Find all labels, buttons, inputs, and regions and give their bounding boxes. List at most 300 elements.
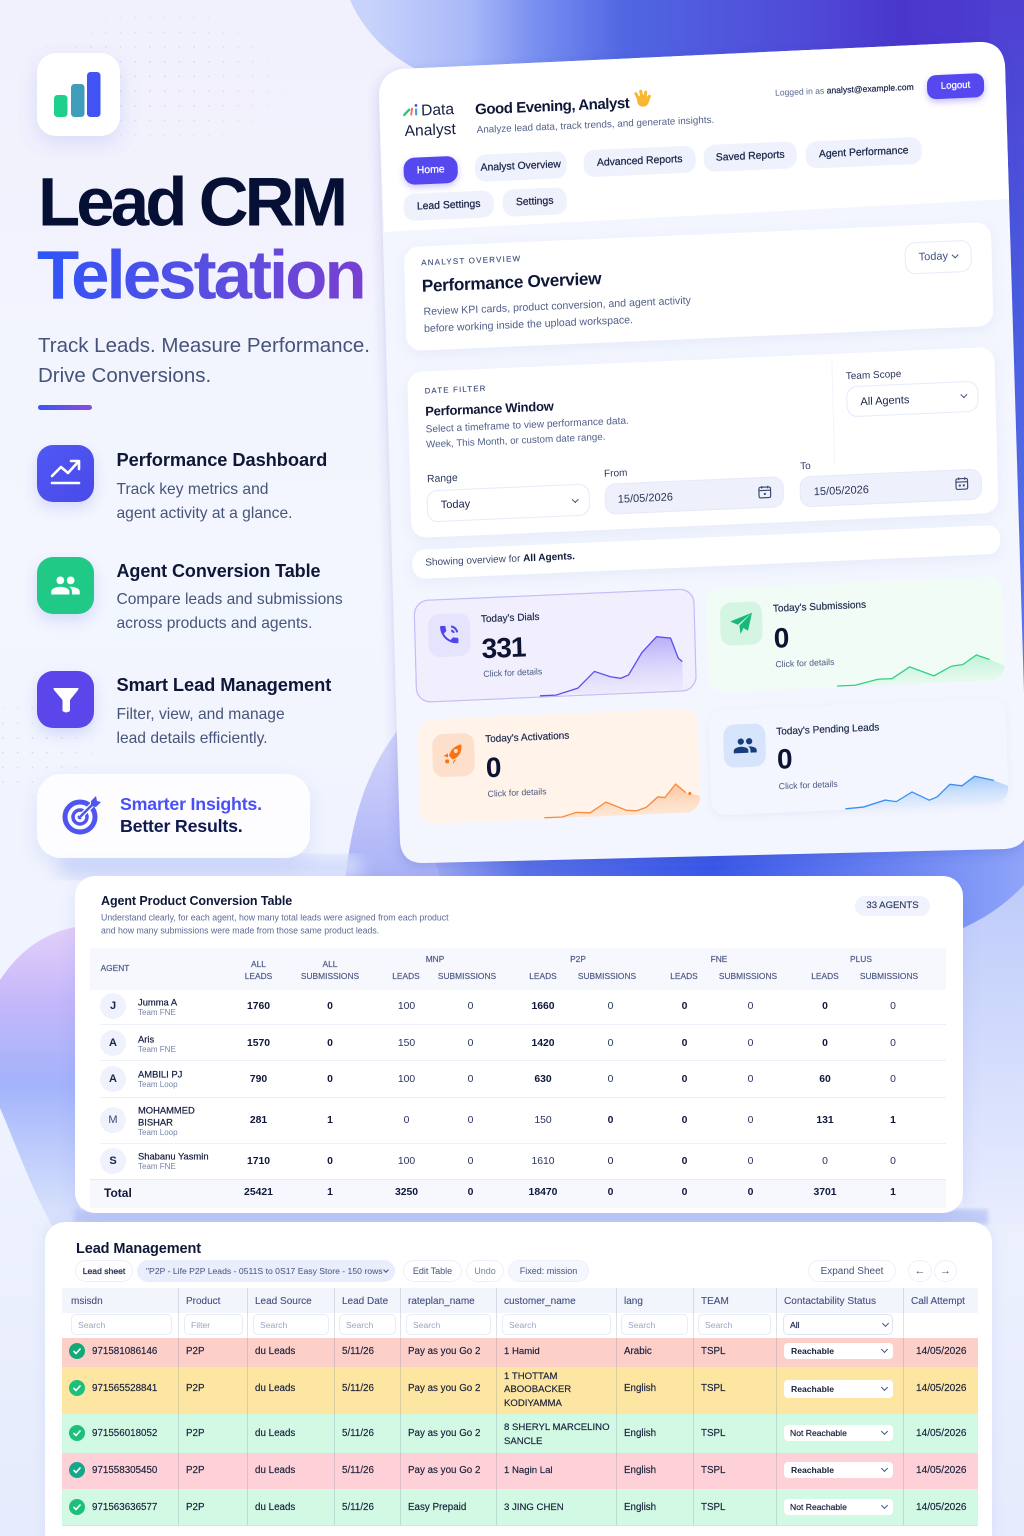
icon: rocket xyxy=(432,733,475,777)
lead row 4: du Leads xyxy=(255,1465,295,1476)
row: total: Total xyxy=(104,1186,132,1200)
row: Aris xyxy=(100,1030,896,1056)
value: 0 xyxy=(485,752,502,783)
icon: people xyxy=(37,557,94,614)
greeting subtitle: Analyze lead data, track trends, and generate insights. xyxy=(477,115,714,136)
label: Today's Pending Leads xyxy=(776,722,880,738)
panel: agent product conversion table: AMBILI PJ xyxy=(138,1068,182,1079)
title line: Telestation: Telestation xyxy=(37,236,364,314)
lead row 2: 14/05/2026 xyxy=(916,1383,967,1394)
lead row 5: du Leads xyxy=(255,1502,295,1513)
tab: settings xyxy=(502,187,567,217)
title xyxy=(37,164,364,314)
panel: lead management: TEAM xyxy=(701,1296,729,1306)
row: Shabanu Yasmin xyxy=(100,1148,896,1174)
lead row 4: Pay as you Go 2 xyxy=(408,1465,480,1476)
lead row 2: P2P xyxy=(186,1383,205,1394)
icon: waving hand xyxy=(634,90,651,107)
value: 331 xyxy=(481,631,526,664)
panel: agent product conversion table xyxy=(73,876,964,1216)
icon: bar chart xyxy=(54,72,100,117)
icon: funnel xyxy=(37,671,94,728)
tab: analyst overview: Analyst Overview xyxy=(480,159,561,174)
panel: lead management: customer_name xyxy=(504,1296,576,1306)
team scope select xyxy=(846,381,979,417)
table header band xyxy=(62,1288,978,1313)
sparkline xyxy=(544,783,700,818)
row: Ambili PJ: A xyxy=(109,1073,117,1085)
hint: Click for details xyxy=(487,786,547,799)
lead row 3: 5/11/26 xyxy=(342,1428,374,1439)
lead row 1: 14/05/2026 xyxy=(916,1346,967,1357)
row: Shabanu Yasmin: 0 xyxy=(682,1156,687,1167)
table header band: PLUS xyxy=(850,954,872,964)
row: Jumma A: 0 xyxy=(327,1001,333,1012)
row: Mohammed Bishar: 1 xyxy=(327,1115,333,1126)
row: Aris: 0 xyxy=(682,1037,687,1048)
table header band: FNE xyxy=(711,954,727,964)
panel: lead management: Search xyxy=(346,1320,373,1330)
table header band: SUBMISSIONS xyxy=(860,971,918,981)
tagline: Drive Conversions. xyxy=(38,364,211,387)
row: Shabanu Yasmin: 0 xyxy=(890,1156,896,1167)
callout text: Smarter Insights. xyxy=(120,794,262,814)
panel: agent product conversion table: MOHAMMED xyxy=(138,1104,195,1115)
row: Ambili PJ: 0 xyxy=(748,1074,753,1085)
row: Shabanu Yasmin: 0 xyxy=(468,1156,473,1167)
lead row 5: English xyxy=(624,1502,656,1513)
row: Ambili PJ: 60 xyxy=(819,1074,831,1085)
row: total: 1 xyxy=(327,1187,333,1198)
toolbar: next arrow: → xyxy=(940,1265,951,1277)
row: total: 3701 xyxy=(813,1187,837,1198)
status bar: Showing overview for All Agents. xyxy=(425,551,575,569)
table header band: MNP xyxy=(426,954,444,964)
panel: agent product conversion table: Shabanu Yasmin xyxy=(138,1150,209,1161)
label: Today's Dials xyxy=(481,612,540,625)
row backgrounds xyxy=(62,1338,978,1526)
panel: agent product conversion table: Team FNE xyxy=(138,1008,176,1017)
panel card xyxy=(75,876,963,1213)
table header band: ALL xyxy=(251,959,266,969)
tab: lead settings xyxy=(403,190,494,221)
toolbar: undo xyxy=(466,1260,504,1282)
row: Jumma A: 100 xyxy=(398,1001,415,1012)
row: Aris: 0 xyxy=(890,1037,896,1048)
row: Mohammed Bishar: 0 xyxy=(608,1115,613,1126)
lead row 1: 5/11/26 xyxy=(342,1346,374,1357)
label: Today's Activations xyxy=(485,731,569,745)
row: Jumma A xyxy=(100,993,896,1019)
lead row 2: du Leads xyxy=(255,1383,295,1394)
toolbar: fixed mission xyxy=(508,1260,589,1282)
row: Aris: 0 xyxy=(327,1037,333,1048)
toolbar: next arrow xyxy=(934,1260,957,1282)
row: Ambili PJ: 0 xyxy=(327,1074,333,1085)
panel: lead management: Search xyxy=(413,1320,440,1330)
lead row 5: P2P xyxy=(186,1502,205,1513)
description line 1: Select a timeframe to view performance data. xyxy=(426,415,629,435)
row: Jumma A: 0 xyxy=(682,1001,687,1012)
sparkline xyxy=(540,636,683,696)
from date input xyxy=(604,476,784,515)
row: total: 0 xyxy=(748,1187,753,1198)
to date input xyxy=(799,469,982,507)
table header band: LEADS xyxy=(670,971,698,981)
tab: saved reports: Saved Reports xyxy=(716,150,785,164)
divider xyxy=(831,359,835,465)
eyebrow: ANALYST OVERVIEW xyxy=(421,254,521,267)
icon: phone xyxy=(428,613,471,658)
row: Shabanu Yasmin: 0 xyxy=(327,1156,333,1167)
lead row 5: Not Reachable xyxy=(790,1502,847,1512)
row: Jumma A: 0 xyxy=(468,1001,473,1012)
team scope label: Team Scope xyxy=(846,369,902,382)
toolbar: previous arrow xyxy=(908,1260,932,1282)
panel: lead management: Contactability Status xyxy=(784,1295,876,1306)
tab: settings: Settings xyxy=(516,196,554,208)
logout button: Logout xyxy=(941,80,970,92)
hint: Click for details xyxy=(483,666,542,679)
kpi card: dials xyxy=(413,588,697,703)
toolbar: sheet selector: "P2P - Life P2P Leads - 0511S to 0S17 Easy Store - 150 rows xyxy=(146,1266,383,1276)
heading: Agent Conversion Table xyxy=(116,561,320,581)
panel: lead management: Filter xyxy=(191,1320,210,1330)
logo tile xyxy=(37,53,120,136)
eyebrow: DATE FILTER xyxy=(425,384,487,396)
row: Ambili PJ: 0 xyxy=(890,1074,896,1085)
toolbar: edit table: Edit Table xyxy=(413,1266,452,1276)
table header band: LEADS xyxy=(245,971,272,981)
lead row 1: Pay as you Go 2 xyxy=(408,1346,480,1357)
heading: Smart Lead Management xyxy=(116,674,331,695)
tab: advanced reports xyxy=(583,145,696,177)
table header band: ALL xyxy=(323,959,337,969)
row: total: 0 xyxy=(608,1187,613,1198)
heading: Performance Dashboard xyxy=(116,449,327,470)
row: Jumma A: 0 xyxy=(822,1001,828,1012)
lead row 5: 971563636577 xyxy=(92,1502,157,1513)
row: Aris: 0 xyxy=(608,1037,613,1048)
lead row 5: 14/05/2026 xyxy=(916,1502,967,1513)
lead row 2 xyxy=(69,1371,967,1409)
table header band xyxy=(90,948,946,990)
lead row 3: du Leads xyxy=(255,1428,295,1439)
lead row 3: P2P xyxy=(186,1428,205,1439)
lead row 5: TSPL xyxy=(701,1502,726,1513)
tab: agent performance: Agent Performance xyxy=(819,145,909,160)
hint: Click for details xyxy=(779,779,838,791)
row: Jumma A: J xyxy=(110,1000,116,1012)
table header band: LEADS xyxy=(811,971,839,981)
lead row 1: TSPL xyxy=(701,1346,726,1357)
tagline: Track Leads. Measure Performance. xyxy=(38,334,370,357)
description line 2: agent activity at a glance. xyxy=(116,505,292,522)
lead row 3 xyxy=(69,1422,967,1447)
feature: performance dashboard xyxy=(32,445,327,522)
row: Shabanu Yasmin: S xyxy=(109,1155,117,1167)
toolbar: lead sheet: Lead sheet xyxy=(83,1266,125,1276)
value: 0 xyxy=(777,743,793,775)
panel: dashboard content xyxy=(400,73,1008,824)
lead row 2: TSPL xyxy=(701,1383,726,1394)
icon: trend chart xyxy=(37,445,94,502)
from date input: 15/05/2026 xyxy=(618,491,673,506)
header labels xyxy=(100,954,918,981)
description line 2: lead details efficiently. xyxy=(116,730,268,747)
row: total xyxy=(104,1186,896,1200)
table header band: LEADS xyxy=(392,971,420,981)
lead row 1: 971581086146 xyxy=(92,1346,157,1357)
row: Shabanu Yasmin: 0 xyxy=(822,1156,828,1167)
panel: lead management: Call Attempt xyxy=(911,1296,965,1306)
value: 0 xyxy=(773,622,790,654)
lead row 3: English xyxy=(624,1428,656,1439)
icon: calendar xyxy=(758,486,772,498)
badge: 33 agents xyxy=(855,896,930,916)
row: Aris: A xyxy=(109,1036,117,1048)
icon: paper plane xyxy=(720,601,763,646)
description line 1: Filter, view, and manage xyxy=(116,706,285,723)
lead row 5: 3 JING CHEN xyxy=(504,1502,564,1513)
icon: target xyxy=(62,796,101,834)
panel: lead management: Search xyxy=(78,1320,105,1330)
row: Aris: 0 xyxy=(748,1037,753,1048)
panel: lead management: SANCLE xyxy=(504,1436,542,1447)
row: Jumma A: 0 xyxy=(608,1001,613,1012)
lead row 1: Arabic xyxy=(624,1346,652,1357)
range select: Today xyxy=(441,498,470,511)
panel: lead management: All xyxy=(790,1320,800,1330)
row: Jumma A: 1660 xyxy=(531,1001,555,1012)
row: total: 0 xyxy=(682,1187,687,1198)
from label: From xyxy=(604,468,628,480)
lead row 2: Pay as you Go 2 xyxy=(408,1383,480,1394)
toolbar: previous arrow: ← xyxy=(914,1265,926,1277)
toolbar: undo: Undo xyxy=(474,1266,496,1276)
tab: home: Home xyxy=(417,164,445,176)
lead row 5: Easy Prepaid xyxy=(408,1502,466,1513)
row: Ambili PJ: 630 xyxy=(534,1074,552,1085)
lead row 4: P2P xyxy=(186,1465,205,1476)
panel: dashboard background xyxy=(373,42,1024,872)
row: total: 18470 xyxy=(529,1187,557,1198)
tab: analyst overview xyxy=(474,151,567,182)
callout text 2: Better Results. xyxy=(120,816,242,836)
table header band: SUBMISSIONS xyxy=(719,971,777,981)
row: total: 25421 xyxy=(244,1187,273,1198)
row: Shabanu Yasmin: 0 xyxy=(748,1156,753,1167)
lead row 4: 971558305450 xyxy=(92,1465,157,1476)
panel: lead management: rateplan_name xyxy=(408,1296,475,1306)
sparkline xyxy=(845,776,1008,810)
row: Mohammed Bishar: 150 xyxy=(534,1115,552,1126)
brand name: Data xyxy=(421,101,454,119)
table header band: SUBMISSIONS xyxy=(578,971,636,981)
row: Mohammed Bishar: 0 xyxy=(468,1115,473,1126)
heading: Performance Window xyxy=(425,398,554,419)
row: Mohammed Bishar: 281 xyxy=(250,1115,267,1126)
tab: advanced reports: Advanced Reports xyxy=(597,154,683,169)
feature: agent conversion table xyxy=(32,557,343,632)
panel: lead management: 8 SHERYL MARCELINO xyxy=(504,1422,610,1433)
panel: date filter xyxy=(407,347,999,538)
description line 2: and how many submissions were made from those same product leads. xyxy=(101,926,379,936)
panel: agent product conversion table: Aris xyxy=(138,1033,154,1044)
lead row 3: TSPL xyxy=(701,1428,726,1439)
label: Today's Submissions xyxy=(773,600,866,615)
row: Ambili PJ: 790 xyxy=(250,1074,267,1085)
brand name 2: Analyst xyxy=(404,121,456,140)
panel: agent product conversion table: Team FNE xyxy=(138,1162,176,1171)
lead row 3: Not Reachable xyxy=(790,1428,847,1438)
row: Aris: 1570 xyxy=(247,1037,270,1048)
row: Mohammed Bishar: 0 xyxy=(682,1115,687,1126)
lead row 1: 1 Hamid xyxy=(504,1346,540,1357)
lead row 4: TSPL xyxy=(701,1465,726,1476)
icon: people xyxy=(723,723,766,768)
toolbar: expand sheet: Expand Sheet xyxy=(821,1266,883,1277)
today dropdown xyxy=(904,240,972,275)
icon: calendar xyxy=(955,477,968,490)
panel: agent product conversion table: Team Loop xyxy=(138,1080,178,1089)
feature: smart lead management xyxy=(32,671,332,747)
lead row 4: 14/05/2026 xyxy=(916,1465,967,1476)
description line 2: across products and agents. xyxy=(116,615,312,632)
lead row 2: 971565528841 xyxy=(92,1383,157,1394)
panel: agent product conversion table: Team Loop xyxy=(138,1128,178,1137)
heading: Performance Overview xyxy=(422,268,601,296)
row: Mohammed Bishar: M xyxy=(108,1114,118,1126)
sparkline xyxy=(837,654,1004,687)
accent line xyxy=(38,405,92,410)
kpi card: submissions xyxy=(705,576,1005,693)
range select xyxy=(426,483,590,522)
to date input: 15/05/2026 xyxy=(814,484,869,498)
row: total: 3250 xyxy=(395,1187,418,1198)
lead row 5 xyxy=(69,1499,967,1515)
description line 1: Understand clearly, for each agent, how many total leads were asigned from each product xyxy=(101,913,449,923)
logged in label: Logged in as analyst@example.com xyxy=(775,82,914,98)
row: Ambili PJ: 0 xyxy=(468,1074,473,1085)
lead row 1: Reachable xyxy=(791,1346,834,1356)
range label: Range xyxy=(427,473,458,485)
row: Jumma A: 0 xyxy=(890,1001,896,1012)
row: Aris: 1420 xyxy=(531,1037,555,1048)
row: Ambili PJ: 0 xyxy=(682,1074,687,1085)
lead row 4 xyxy=(69,1462,967,1478)
table header band: AGENT xyxy=(101,963,129,973)
panel: lead management: ABOOBACKER xyxy=(504,1384,571,1395)
column separators xyxy=(178,1288,904,1525)
row: Shabanu Yasmin: 0 xyxy=(608,1156,613,1167)
badge: 33 agents: 33 AGENTS xyxy=(866,900,919,911)
to label: To xyxy=(800,461,811,472)
lead row 3: 14/05/2026 xyxy=(916,1428,967,1439)
panel: lead management: msisdn xyxy=(71,1296,103,1306)
toolbar: lead sheet xyxy=(75,1260,133,1282)
heading: Lead Management xyxy=(76,1240,201,1256)
panel: lead management: lang xyxy=(624,1296,643,1306)
toolbar: fixed mission: Fixed: mission xyxy=(520,1266,577,1276)
lead row 3: Pay as you Go 2 xyxy=(408,1428,480,1439)
panel: agent product conversion table: BISHAR xyxy=(138,1116,173,1127)
hint: Click for details xyxy=(775,657,834,669)
title line: Lead CRM: Lead CRM xyxy=(38,164,344,240)
panel: lead management: 1 THOTTAM xyxy=(504,1371,557,1382)
row: total: 0 xyxy=(468,1187,473,1198)
icon: data analyst logo xyxy=(403,104,418,116)
lead row 5: 5/11/26 xyxy=(342,1502,374,1513)
row: Mohammed Bishar: 0 xyxy=(404,1115,409,1126)
lead row 1: du Leads xyxy=(255,1346,295,1357)
panel: lead management: Search xyxy=(260,1320,287,1330)
panel: agent product conversion table: Team FNE xyxy=(138,1044,176,1054)
row: total: 1 xyxy=(890,1187,896,1198)
row: Shabanu Yasmin: 1610 xyxy=(531,1156,555,1167)
lead row 4: 5/11/26 xyxy=(342,1465,374,1476)
panel: lead management: Search xyxy=(628,1320,655,1330)
row: Ambili PJ: 100 xyxy=(398,1074,415,1085)
panel: lead management: KODIYAMMA xyxy=(504,1398,562,1409)
row: Mohammed Bishar: 1 xyxy=(890,1115,896,1126)
toolbar: edit table xyxy=(403,1260,462,1282)
tab: lead settings: Lead Settings xyxy=(417,199,481,213)
filter inputs xyxy=(71,1314,893,1335)
row: Mohammed Bishar: 0 xyxy=(748,1115,753,1126)
panel card xyxy=(45,1222,992,1536)
lead row 4: English xyxy=(624,1465,656,1476)
team scope select: All Agents xyxy=(860,394,910,408)
panel: lead management: Lead Source xyxy=(255,1296,312,1306)
row: Ambili PJ xyxy=(100,1066,896,1092)
kpi card: activations xyxy=(418,708,700,824)
tagline xyxy=(38,334,370,387)
lead row 2: English xyxy=(624,1383,656,1394)
row: Mohammed Bishar: 131 xyxy=(816,1115,834,1126)
column headers xyxy=(71,1295,965,1306)
toolbar: expand sheet xyxy=(808,1260,896,1282)
table header band: SUBMISSIONS xyxy=(438,971,496,981)
row: Mohammed Bishar xyxy=(100,1104,896,1137)
panel: lead management: Search xyxy=(509,1320,536,1330)
status bar xyxy=(412,525,1001,579)
toolbar: sheet selector xyxy=(137,1260,395,1282)
lead row 1 xyxy=(69,1343,967,1359)
lead row 2: 5/11/26 xyxy=(342,1383,374,1394)
lead row 2: Reachable xyxy=(791,1384,834,1394)
panel: lead management: Search xyxy=(705,1320,732,1330)
table header band: SUBMISSIONS xyxy=(301,971,359,981)
description line 1: Compare leads and submissions xyxy=(116,591,343,608)
tab: agent performance xyxy=(805,137,922,169)
panel: lead management: Lead Date xyxy=(342,1296,388,1306)
row: Shabanu Yasmin: 1710 xyxy=(247,1156,270,1167)
table header band: LEADS xyxy=(529,971,557,981)
description line 2: Week, This Month, or custom date range. xyxy=(426,432,606,451)
description line 2: before working inside the upload workspace. xyxy=(424,314,633,335)
logout button xyxy=(927,73,984,99)
row: Jumma A: 1760 xyxy=(247,1001,270,1012)
heading: Agent Product Conversion Table xyxy=(101,894,292,908)
lead row 3: 971556018052 xyxy=(92,1428,157,1439)
panel: performance overview xyxy=(404,222,994,351)
tab: saved reports xyxy=(703,141,797,172)
description line 1: Track key metrics and xyxy=(116,481,268,498)
panel: agent product conversion table: Jumma A xyxy=(138,996,177,1007)
row: Aris: 150 xyxy=(398,1037,415,1048)
lead row 1: P2P xyxy=(186,1346,205,1357)
